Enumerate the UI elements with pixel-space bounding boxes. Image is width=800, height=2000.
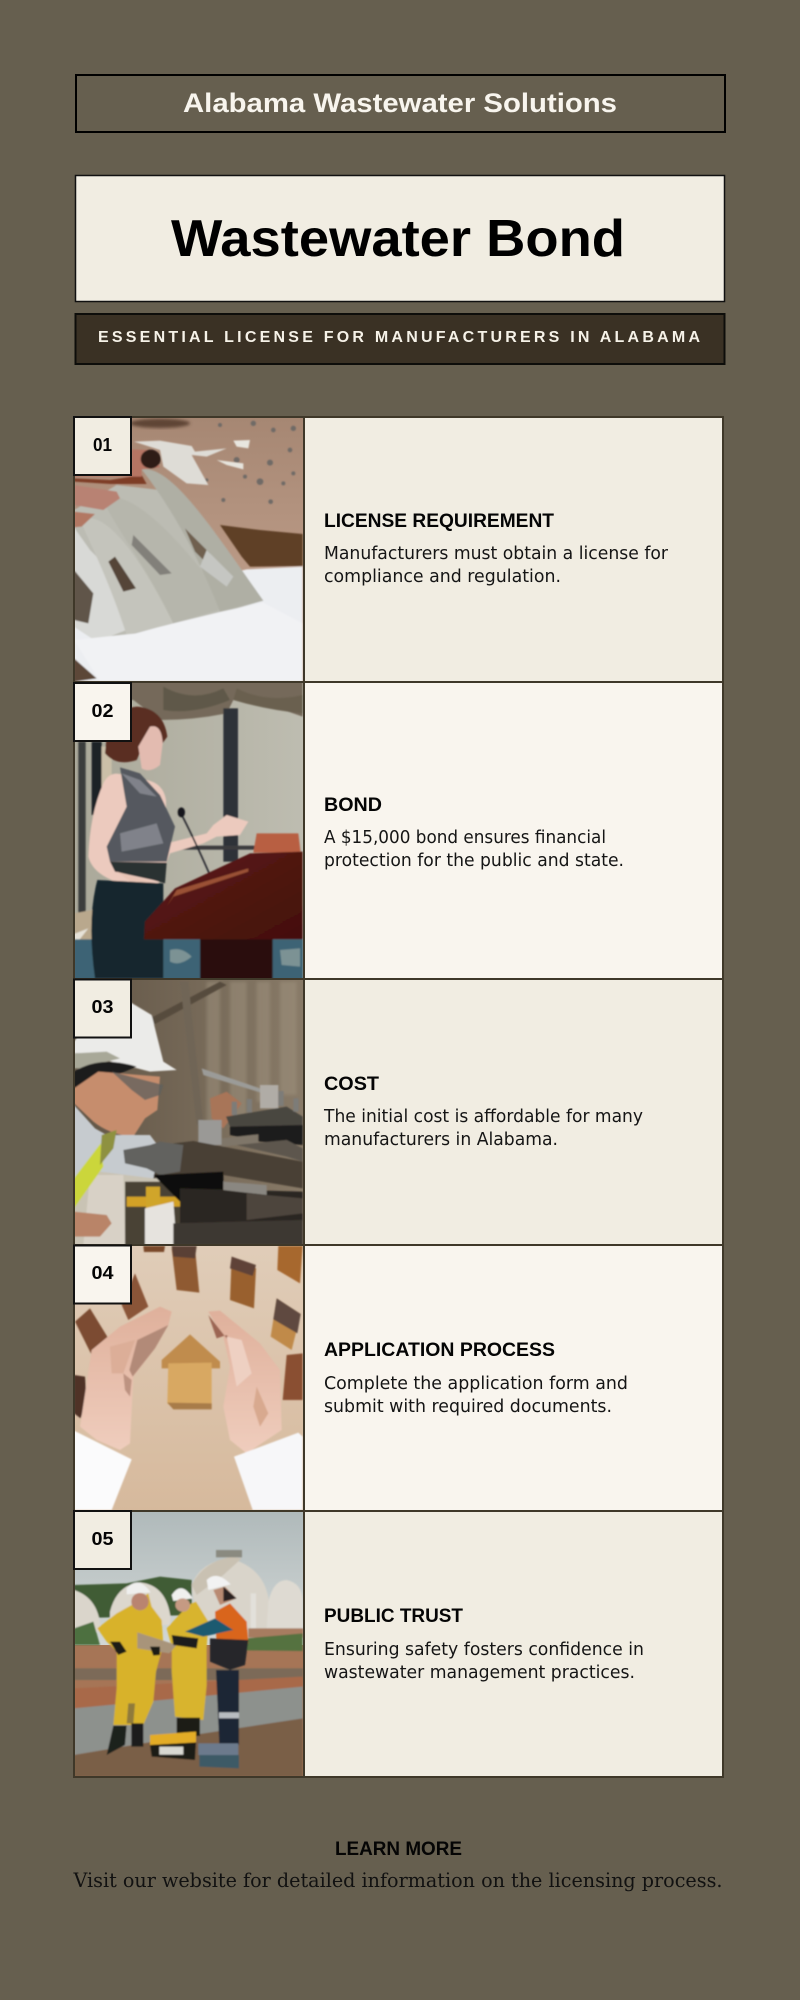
step text: manufacturers in Alabama. bbox=[324, 1130, 558, 1150]
step text: protection for the public and state. bbox=[324, 851, 624, 871]
number badge: 01 bbox=[93, 435, 112, 455]
number badge: 05 bbox=[92, 1529, 114, 1549]
step text: APPLICATION PROCESS bbox=[324, 1340, 555, 1361]
photo: hands around wooden house bbox=[75, 1246, 303, 1510]
photo: woman speaking at podium bbox=[75, 683, 303, 978]
step text: submit with required documents. bbox=[324, 1397, 612, 1417]
step text bbox=[324, 1340, 628, 1417]
step text: Manufacturers must obtain a license for bbox=[324, 544, 669, 564]
number badge bbox=[74, 417, 131, 475]
step text: A $15,000 bond ensures financial bbox=[324, 828, 606, 848]
number badge: 04 bbox=[92, 1263, 114, 1283]
number badge bbox=[74, 683, 131, 741]
panel: step 2 bond bbox=[60, 680, 724, 981]
step text: wastewater management practices. bbox=[324, 1663, 635, 1683]
step text bbox=[324, 1606, 644, 1683]
photo: machinist at lathe bbox=[75, 980, 303, 1244]
step text: Complete the application form and bbox=[324, 1374, 628, 1394]
number badge: 02 bbox=[92, 701, 114, 721]
panel: step 4 application process bbox=[60, 1240, 724, 1513]
panel: step 5 public trust bbox=[60, 1505, 724, 1778]
subtitle band bbox=[76, 314, 724, 364]
title panel: Wastewater Bond bbox=[171, 210, 625, 268]
photo: inspectors at storage tanks bbox=[75, 1512, 303, 1776]
panel: step 3 cost bbox=[60, 975, 724, 1248]
step text: PUBLIC TRUST bbox=[324, 1606, 463, 1627]
header banner bbox=[76, 75, 725, 132]
title panel bbox=[76, 176, 724, 302]
step text: The initial cost is affordable for many bbox=[323, 1107, 643, 1127]
footer call to action bbox=[73, 1839, 723, 1892]
panel: step 1 license requirement bbox=[60, 410, 724, 700]
step text bbox=[324, 795, 624, 871]
step text: LICENSE REQUIREMENT bbox=[324, 511, 554, 532]
photo: wastewater pipes bbox=[75, 418, 303, 681]
number badge bbox=[74, 1511, 131, 1569]
step text: COST bbox=[324, 1074, 379, 1095]
number badge bbox=[74, 980, 131, 1038]
subtitle band: ESSENTIAL LICENSE FOR MANUFACTURERS IN ALABAMA bbox=[98, 329, 700, 346]
step text bbox=[323, 1074, 643, 1150]
header banner: Alabama Wastewater Solutions bbox=[183, 88, 617, 118]
number badge: 03 bbox=[92, 997, 114, 1017]
step text: Ensuring safety fosters confidence in bbox=[324, 1640, 644, 1660]
step text: BOND bbox=[324, 795, 382, 816]
footer call to action: Visit our website for detailed information on the licensing process. bbox=[73, 1868, 723, 1892]
footer call to action: LEARN MORE bbox=[335, 1839, 462, 1860]
step text bbox=[324, 511, 669, 587]
step text: compliance and regulation. bbox=[324, 567, 561, 587]
number badge bbox=[74, 1246, 131, 1304]
